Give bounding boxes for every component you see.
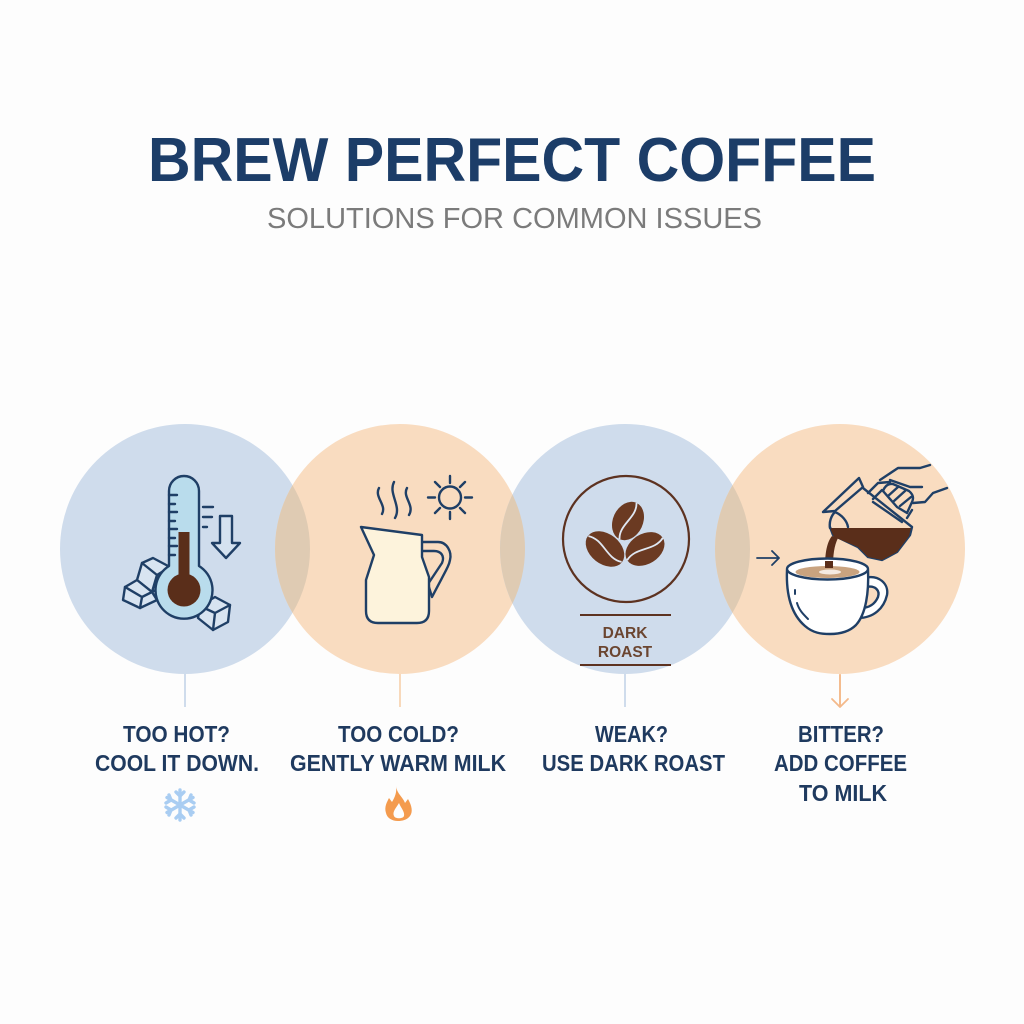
steam: [378, 482, 411, 518]
three coffee beans: [579, 497, 671, 574]
dark roast label: ROAST: [598, 644, 653, 661]
caption: bitter: [774, 721, 907, 806]
jug body: [361, 527, 429, 623]
thermometer body: [156, 476, 212, 619]
thermometer ticks: [169, 495, 177, 555]
icon: ice cubes: [123, 558, 230, 630]
subtitle: SOLUTIONS FOR COMMON ISSUES: [267, 203, 762, 235]
carafe: [823, 478, 912, 560]
icon: flame: [385, 786, 412, 821]
caption: too cold: [290, 721, 506, 776]
caption: weak: USE DARK ROAST: [542, 750, 725, 776]
caption: too cold: GENTLY WARM MILK: [290, 750, 506, 776]
small arrow: [757, 551, 779, 565]
cup rim and coffee: [787, 558, 868, 580]
caption: too hot: TOO HOT?: [123, 721, 230, 747]
pouring stream: [825, 536, 838, 567]
icon: milk jug with steam and sun: [361, 476, 472, 623]
connector stems: [185, 674, 840, 707]
icon: dark roast coffee beans: [563, 476, 689, 665]
stream entering cup: [825, 561, 833, 568]
caption: too hot: COOL IT DOWN.: [95, 750, 259, 776]
cup handle: [858, 577, 887, 618]
cup body: [787, 570, 868, 634]
thermometer mercury: [168, 532, 200, 606]
caption: bitter: BITTER?: [798, 721, 884, 747]
caption: weak: WEAK?: [595, 721, 668, 747]
caption: weak: [542, 721, 725, 776]
jug handle: [422, 542, 450, 597]
icon: snowflake: [166, 790, 194, 820]
cooling dashes: [203, 507, 213, 527]
icon: thermometer with ice cubes: [123, 476, 240, 630]
overlapping circles: [60, 424, 965, 674]
hand: [868, 465, 947, 518]
dark roast label: [580, 615, 671, 665]
cup highlight: [795, 590, 808, 619]
icon: down arrow under bitter column: [832, 675, 848, 707]
title: BREW PERFECT COFFEE: [148, 126, 876, 195]
caption: too cold: TOO COLD?: [338, 721, 459, 747]
icon: pouring coffee into milk cup: [757, 465, 947, 634]
down arrow: [212, 516, 240, 558]
caption: bitter: ADD COFFEE: [774, 750, 907, 776]
caption: bitter: TO MILK: [799, 780, 887, 806]
bean badge ring: [563, 476, 689, 602]
dark roast label: DARK: [603, 625, 648, 642]
caption: too hot: [95, 721, 259, 776]
sun: [428, 476, 472, 519]
